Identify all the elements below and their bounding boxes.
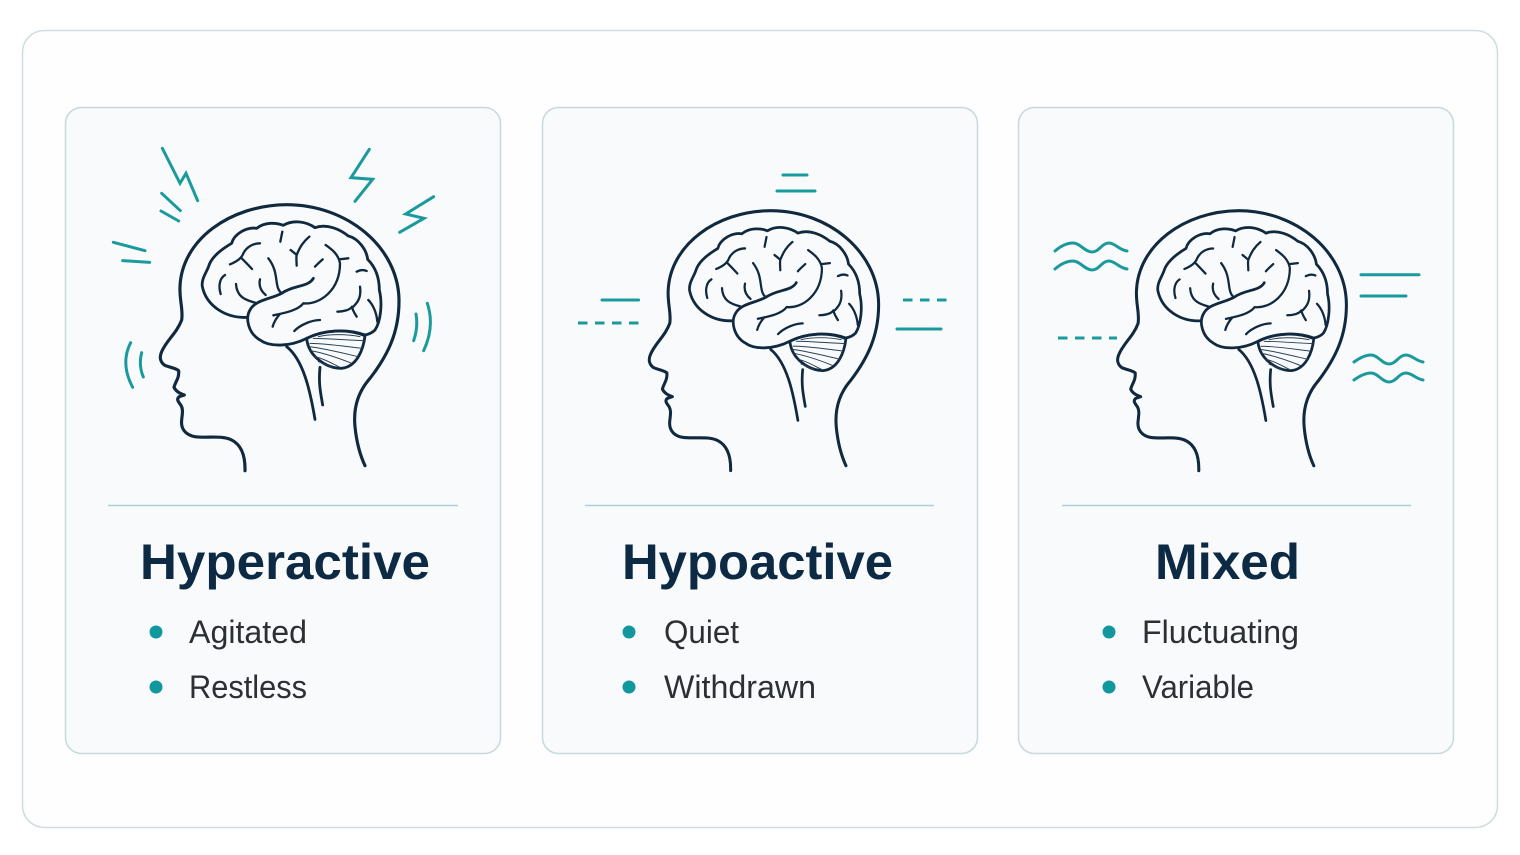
heading: Hypoactive: Hypoactive — [622, 534, 893, 590]
bullet: Restless: Restless — [189, 669, 307, 705]
panel: mixed — [1018, 108, 1454, 754]
bullet: Fluctuating: Fluctuating — [1142, 614, 1299, 650]
heading: Hyperactive: Hyperactive — [140, 534, 430, 590]
bullet: Quiet — [622, 614, 739, 650]
bullet: Agitated: Agitated — [189, 614, 307, 650]
panel: hypoactive — [542, 108, 978, 754]
icon: head with brain, hyperactive — [160, 205, 399, 471]
bullet: Quiet: Quiet — [664, 614, 739, 650]
icon: head with brain, hypoactive — [649, 211, 879, 471]
panel: hyperactive — [66, 108, 500, 754]
bullet: Withdrawn: Withdrawn — [664, 669, 816, 705]
card background — [542, 108, 978, 754]
card background — [66, 108, 500, 754]
icon: waves, flat and dashed lines — [1055, 243, 1423, 382]
icon: head with brain, mixed — [1118, 211, 1346, 471]
bullet: Variable: Variable — [1142, 669, 1254, 705]
icon: flat and dashed lines — [578, 175, 952, 329]
card background — [1018, 108, 1454, 754]
icon: agitation bolts and motion marks — [113, 148, 434, 387]
heading: Mixed: Mixed — [1155, 534, 1300, 590]
